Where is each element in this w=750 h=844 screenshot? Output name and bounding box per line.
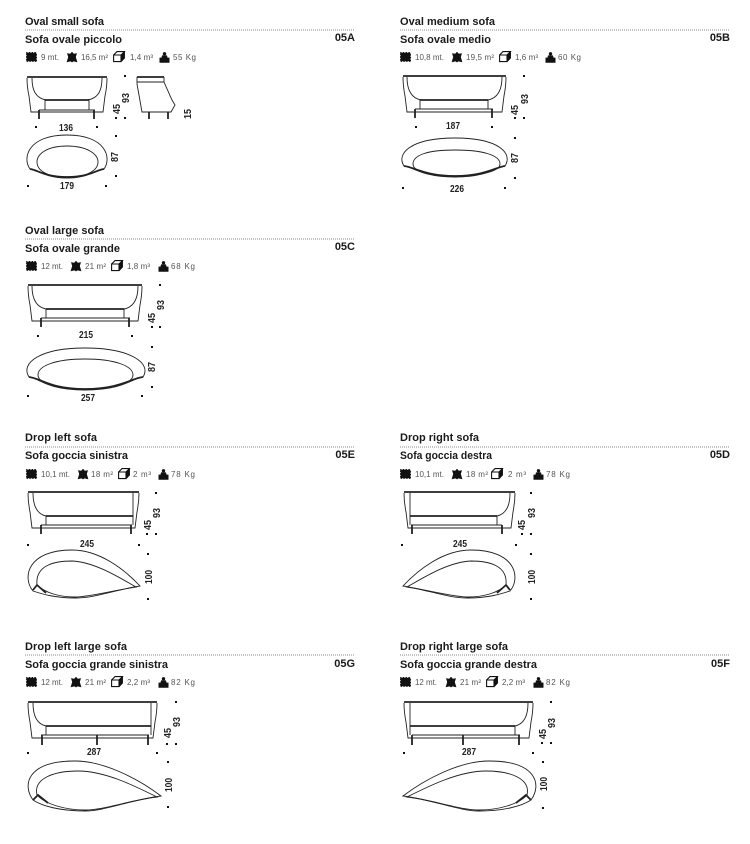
- top view drawing: [27, 348, 145, 390]
- dimension labels: 245: [453, 539, 467, 550]
- dimension labels: 93: [527, 508, 538, 518]
- specs row: 68 Kg: [171, 262, 195, 271]
- dimension labels: [28, 701, 183, 808]
- dimension labels: 87: [110, 152, 121, 162]
- dimension labels: 45: [163, 728, 174, 738]
- code 05D: 05D: [710, 449, 730, 461]
- side view drawing: [137, 77, 175, 119]
- dimension labels: 100: [539, 777, 550, 791]
- dimension labels: 100: [164, 778, 175, 792]
- subheading: Sofa ovale grande: Sofa ovale grande: [25, 243, 120, 255]
- specs row: 12 mt.: [41, 678, 63, 687]
- dimension labels: [28, 492, 163, 600]
- dimension labels: 93: [172, 717, 183, 727]
- front view drawing: [28, 492, 139, 534]
- code 05F: 05F: [711, 658, 730, 670]
- front view drawing: [28, 285, 142, 327]
- specs row: 18 m²: [91, 470, 113, 479]
- heading: Drop left large sofa: Drop left large sofa: [25, 641, 128, 653]
- subheading: Sofa ovale piccolo: Sofa ovale piccolo: [25, 34, 122, 46]
- subheading: Sofa ovale medio: Sofa ovale medio: [400, 34, 491, 46]
- subheading: Sofa goccia destra: Sofa goccia destra: [400, 450, 493, 462]
- specs row: 55 Kg: [173, 53, 196, 62]
- dimension labels: 287: [87, 747, 101, 758]
- specs row: 60 Kg: [558, 53, 581, 62]
- specs row: 19,5 m²: [466, 53, 494, 62]
- dimension labels: 93: [520, 94, 531, 104]
- specs row: 82 Kg: [546, 678, 570, 687]
- dimension labels: 87: [510, 153, 521, 163]
- top view drawing: [403, 550, 515, 598]
- specs row: 12 mt.: [415, 678, 437, 687]
- specs row: 21 m²: [460, 678, 481, 687]
- dimension labels: 93: [156, 300, 167, 310]
- specs row: 1,4 m³: [130, 53, 153, 62]
- code 05G: 05G: [334, 658, 355, 670]
- heading: Drop left sofa: Drop left sofa: [25, 432, 98, 444]
- specs row: 10,1 mt.: [415, 470, 444, 479]
- specs row: [400, 52, 581, 63]
- dimension labels: 45: [510, 105, 521, 115]
- heading: Drop right large sofa: Drop right large sofa: [400, 641, 509, 653]
- front view drawing: [404, 492, 515, 534]
- dimension labels: 45: [538, 729, 549, 739]
- specs row: [26, 469, 195, 480]
- specs row: 78 Kg: [546, 470, 570, 479]
- code 05B: 05B: [710, 32, 730, 44]
- specs row: 10,1 mt.: [41, 470, 70, 479]
- dimension labels: 45: [517, 520, 528, 530]
- specs row: 2,2 m³: [127, 678, 150, 687]
- specs row: 82 Kg: [171, 678, 195, 687]
- dimension labels: 100: [527, 570, 538, 584]
- top view drawing: [402, 138, 507, 177]
- dimension labels: 45: [143, 520, 154, 530]
- subheading: Sofa goccia grande sinistra: Sofa goccia grande sinistra: [25, 659, 169, 671]
- dimension labels: 136: [59, 123, 73, 134]
- specs row: 12 mt.: [41, 262, 63, 271]
- panel: Drop right large sofa: [400, 641, 730, 811]
- top view drawing: [28, 761, 161, 811]
- dimension labels: 15: [183, 109, 194, 119]
- panel: Drop left large sofa: [25, 641, 355, 811]
- specs row: 78 Kg: [171, 470, 195, 479]
- dimension labels: 245: [80, 539, 94, 550]
- specs row: 9 mt.: [41, 53, 59, 62]
- top view drawing: [403, 761, 536, 811]
- specs row: 21 m²: [85, 262, 106, 271]
- specs row: 2 m³: [508, 470, 526, 479]
- dimension labels: [28, 284, 167, 404]
- specs row: 2,2 m³: [502, 678, 525, 687]
- specs row: [26, 677, 195, 688]
- heading: Oval small sofa: Oval small sofa: [25, 16, 105, 28]
- specs row: 16,5 m²: [81, 53, 108, 62]
- dimension labels: 87: [147, 362, 158, 372]
- front view drawing: [27, 77, 107, 119]
- dimension labels: 93: [121, 93, 132, 103]
- dimension labels: 45: [112, 104, 123, 114]
- panel: Drop left sofa: [25, 432, 355, 600]
- subheading: Sofa goccia grande destra: Sofa goccia grande destra: [400, 659, 538, 671]
- top view drawing: [27, 135, 107, 178]
- specs row: 21 m²: [85, 678, 106, 687]
- panel: Oval large sofa: [25, 225, 355, 404]
- subheading: Sofa goccia sinistra: Sofa goccia sinistra: [25, 450, 129, 462]
- heading: Oval large sofa: Oval large sofa: [25, 225, 105, 237]
- panel: Oval small sofa: [25, 16, 355, 192]
- panel: Oval medium sofa: [400, 16, 730, 195]
- top view drawing: [28, 550, 140, 598]
- code 05E: 05E: [335, 449, 355, 461]
- code 05C: 05C: [335, 241, 355, 253]
- dimension labels: 257: [81, 393, 95, 404]
- dimension labels: [28, 75, 194, 192]
- dimension labels: 187: [446, 121, 460, 132]
- heading: Drop right sofa: Drop right sofa: [400, 432, 480, 444]
- code 05A: 05A: [335, 32, 355, 44]
- dimension labels: 226: [450, 184, 464, 195]
- dimension labels: 215: [79, 330, 93, 341]
- specs row: [400, 677, 570, 688]
- heading: Oval medium sofa: Oval medium sofa: [400, 16, 496, 28]
- dimension labels: 179: [60, 181, 74, 192]
- specs row: 18 m²: [466, 470, 488, 479]
- dimension labels: [402, 492, 538, 600]
- front view drawing: [403, 76, 506, 118]
- specs row: [400, 469, 570, 480]
- specs row: [26, 52, 196, 63]
- dimension labels: 93: [152, 508, 163, 518]
- dimension labels: 45: [147, 313, 158, 323]
- front view drawing: [28, 702, 157, 745]
- dimension labels: 93: [547, 718, 558, 728]
- dimension labels: 287: [462, 747, 476, 758]
- specs row: [26, 261, 195, 272]
- panel: Drop right sofa: [400, 432, 730, 600]
- specs row: 2 m³: [133, 470, 151, 479]
- front view drawing: [404, 702, 533, 745]
- dimension labels: 100: [144, 570, 155, 584]
- specs row: 1,8 m³: [127, 262, 150, 271]
- specs row: 10,8 mt.: [415, 53, 444, 62]
- dimension labels: [404, 701, 558, 809]
- specs row: 1,6 m³: [515, 53, 538, 62]
- dimension labels: [403, 75, 531, 195]
